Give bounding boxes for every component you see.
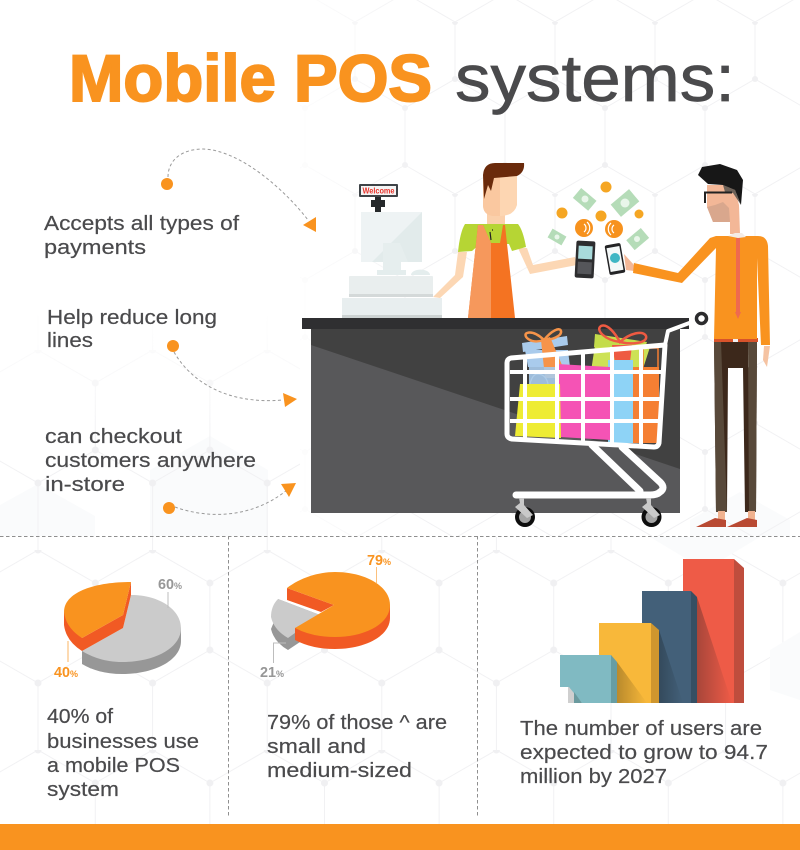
blue bar bbox=[642, 591, 697, 703]
pie chart: 40 percent bbox=[54, 576, 182, 681]
text: 79 percent small and medium: small and bbox=[267, 735, 366, 758]
label: 21 percent bbox=[260, 643, 286, 681]
checkout counter bbox=[302, 318, 689, 513]
text: checkout anywhere: in-store bbox=[45, 473, 125, 496]
cashier bbox=[433, 163, 577, 318]
red bar bbox=[683, 559, 744, 703]
text: users expected to grow: million by 2027 bbox=[520, 765, 667, 788]
label: 60 percent bbox=[158, 576, 182, 608]
text: checkout anywhere: customers anywhere bbox=[45, 449, 256, 472]
shopping cart bbox=[507, 314, 706, 527]
label: 21 percent: 21 bbox=[260, 664, 276, 681]
footer bar bbox=[0, 824, 800, 850]
title: Mobile POS bbox=[69, 41, 432, 115]
text: users expected to grow: expected to grow to 94.7 bbox=[520, 741, 768, 764]
cart basket bbox=[507, 345, 665, 447]
arrow: payments callout bbox=[161, 149, 316, 232]
title: systems: bbox=[455, 41, 735, 115]
label: 79 percent: 79 bbox=[367, 552, 383, 569]
wheels bbox=[515, 507, 535, 527]
title bbox=[69, 41, 735, 115]
text: accepts all types of payments: Accepts all types of bbox=[44, 212, 239, 235]
text: checkout anywhere: can checkout bbox=[45, 425, 182, 448]
yellow bar bbox=[599, 623, 659, 703]
label: 21 percent: % bbox=[276, 669, 284, 679]
text: 40 percent of businesses: a mobile POS bbox=[47, 754, 180, 777]
payment icons bbox=[548, 182, 649, 250]
text: accepts all types of payments: payments bbox=[44, 236, 146, 259]
text: 40 percent of businesses: businesses use bbox=[47, 730, 199, 753]
card terminal bbox=[575, 241, 595, 278]
text: 79 percent small and medium: 79% of those ^ are bbox=[267, 711, 447, 734]
shirt bbox=[633, 236, 770, 345]
text: users expected to grow: The number of users are bbox=[520, 717, 762, 740]
customer bbox=[633, 164, 770, 527]
cash register bbox=[342, 184, 442, 318]
text: 40 percent of businesses: 40% of bbox=[47, 705, 113, 728]
shopping bags and gifts bbox=[515, 326, 659, 443]
label: 40 percent: 40 bbox=[54, 664, 70, 681]
legs bbox=[714, 341, 748, 512]
text: 40 percent of businesses: system bbox=[47, 778, 119, 801]
text: help reduce long lines: lines bbox=[47, 329, 93, 352]
text: help reduce long lines: Help reduce long bbox=[47, 306, 217, 329]
arrow: checkout callout bbox=[163, 483, 296, 514]
dashed section dividers bbox=[0, 536, 800, 818]
head bbox=[707, 185, 740, 234]
welcome sign: Welcome bbox=[362, 186, 395, 196]
cart frame bbox=[516, 445, 663, 495]
text: 79 percent small and medium: medium-sized bbox=[267, 759, 412, 782]
label: 60 percent: 60 bbox=[158, 576, 174, 593]
pie chart: 79 percent bbox=[260, 552, 391, 681]
label: 79 percent bbox=[367, 552, 391, 583]
handle ring bbox=[696, 314, 706, 324]
arrow: long lines callout bbox=[167, 340, 297, 407]
label: 40 percent: % bbox=[70, 669, 78, 679]
smartphone bbox=[605, 243, 634, 275]
teal bar bbox=[560, 655, 617, 703]
label: 60 percent: % bbox=[174, 581, 182, 591]
label: 40 percent bbox=[54, 641, 78, 681]
label: 79 percent: % bbox=[383, 557, 391, 567]
bar chart: growth bbox=[560, 559, 744, 703]
